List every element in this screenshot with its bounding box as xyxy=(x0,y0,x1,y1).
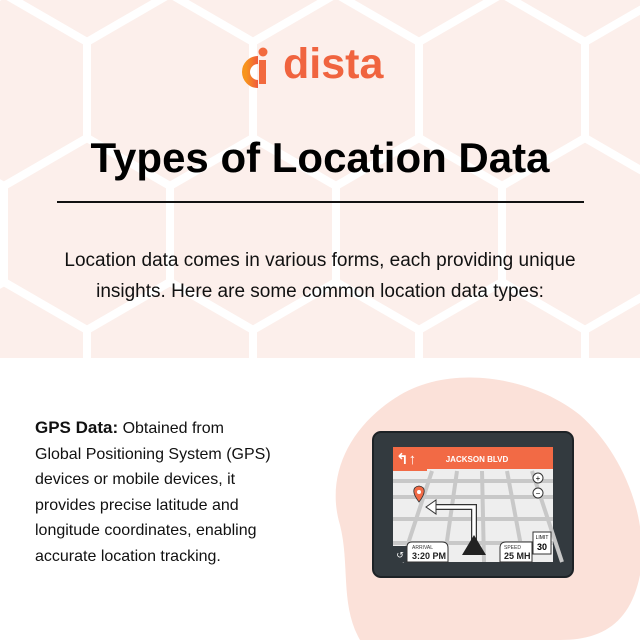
GPS device illustration: 25 MH xyxy=(504,551,531,561)
GPS device illustration xyxy=(372,431,574,578)
header background with hexagon pattern xyxy=(0,0,640,358)
GPS device illustration: ARRIVAL xyxy=(412,545,433,551)
GPS device illustration: 3:20 PM xyxy=(412,551,446,561)
divider xyxy=(57,201,584,203)
GPS device illustration: ↺ xyxy=(396,550,404,560)
GPS device illustration: LIMIT xyxy=(536,535,548,541)
GPS data text: provides precise latitude and xyxy=(35,496,239,514)
GPS device illustration: − xyxy=(536,489,541,498)
GPS device illustration: 30 xyxy=(537,542,547,552)
pink blob xyxy=(336,378,640,640)
GPS data text: GPS Data: Obtained from xyxy=(35,418,224,437)
logo: dista xyxy=(283,40,383,88)
GPS device illustration: + xyxy=(536,474,541,483)
GPS device illustration: JACKSON BLVD xyxy=(446,455,508,464)
GPS data text: Global Positioning System (GPS) xyxy=(35,446,271,462)
GPS device illustration: SPEED xyxy=(504,545,521,551)
GPS data text xyxy=(35,418,271,564)
GPS data text: accurate location tracking. xyxy=(35,548,221,564)
title: Types of Location Data xyxy=(91,134,549,181)
intro text: Location data comes in various forms, each providing unique insights. Here are some common location data types: xyxy=(64,250,576,302)
GPS data text: longitude coordinates, enabling xyxy=(35,522,256,539)
GPS data text: devices or mobile devices, it xyxy=(35,471,235,488)
GPS device illustration: ↰↑ xyxy=(396,451,416,468)
